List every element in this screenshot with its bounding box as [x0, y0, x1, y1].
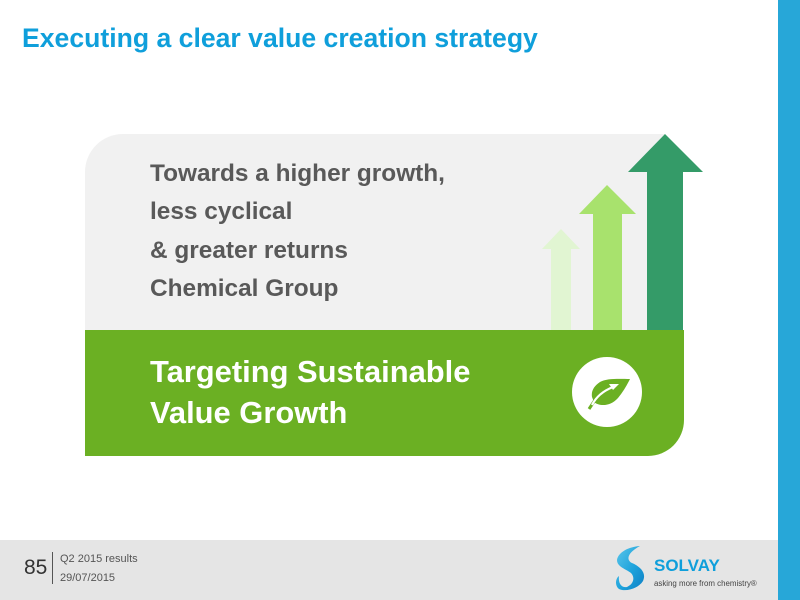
icon: Solvay S mark [616, 546, 644, 590]
footer divider [52, 552, 53, 584]
logo wordmark: SOLVAY [654, 556, 720, 575]
footer text [60, 553, 138, 584]
text block: grey panel statement: Towards a higher growth, [150, 160, 445, 187]
logo: Solvay [616, 546, 757, 590]
text block: grey panel statement: & greater returns [150, 237, 348, 264]
arrow: large dark green [628, 134, 703, 330]
footer text: Q2 2015 results [60, 553, 138, 565]
arrow: medium light green [579, 185, 636, 330]
text block: grey panel statement: Chemical Group [150, 275, 338, 302]
panel: green lower banner [85, 330, 684, 456]
icon: leaf with arrow [572, 357, 642, 427]
page number: 85 [24, 556, 47, 579]
footer text: 29/07/2015 [60, 572, 115, 584]
logo tagline: asking more from chemistry® [654, 579, 757, 588]
text block: grey panel statement: less cyclical [150, 198, 292, 225]
panel: grey upper card [85, 134, 665, 330]
right blue band [778, 0, 800, 600]
title: Executing a clear value creation strategy [22, 23, 538, 53]
text block: green banner heading: Value Growth [150, 394, 347, 430]
text block: green banner heading: Targeting Sustainable [150, 354, 470, 388]
arrow: small pale [542, 229, 580, 330]
footer bar [0, 540, 778, 600]
text block: grey panel statement [150, 160, 445, 302]
text block: green banner heading [150, 354, 470, 430]
